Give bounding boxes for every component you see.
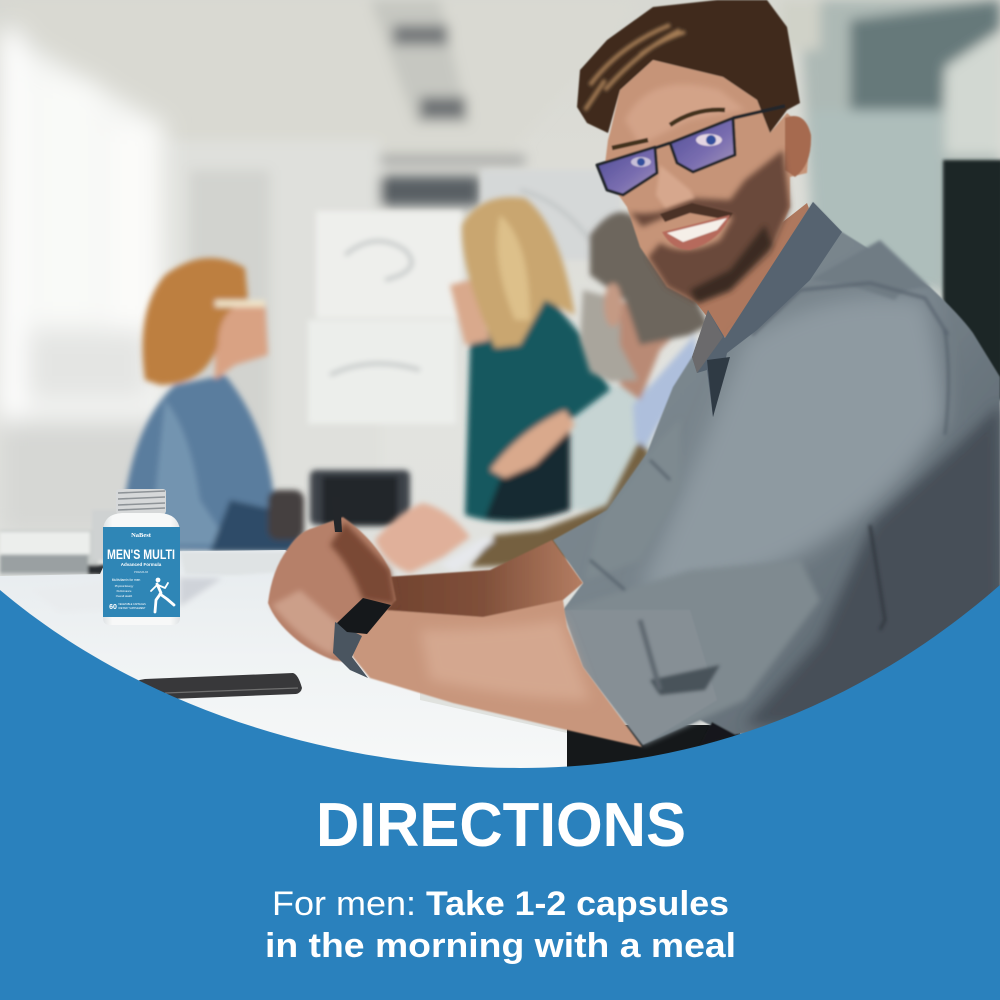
bottle label text: Physical Energy xyxy=(115,584,134,588)
heading: DIRECTIONS: DIRECTIONS xyxy=(316,791,686,860)
product bottle xyxy=(103,489,180,625)
eyebrows xyxy=(612,110,725,148)
smartphone on table xyxy=(133,673,302,699)
glasses xyxy=(597,106,785,195)
left table stack of papers xyxy=(0,510,118,576)
bottle label text: PREMIUM xyxy=(134,570,149,574)
whiteboards xyxy=(308,170,650,510)
man with gray hair xyxy=(375,212,708,573)
neck xyxy=(690,203,815,340)
ear shadow xyxy=(785,116,811,177)
blurred chair xyxy=(310,470,410,526)
bottle label text: Advanced Formula xyxy=(121,562,162,567)
bottle label text: Multivitamin for men xyxy=(112,578,140,582)
face and head xyxy=(577,0,811,303)
pen xyxy=(331,497,342,532)
instruction text: Take 1-2 capsules xyxy=(426,885,729,923)
instruction text xyxy=(265,885,736,965)
instruction text: in the morning with a meal xyxy=(265,927,736,965)
bottle label text: Overall Health xyxy=(116,594,133,598)
photo background: blurred meeting room xyxy=(0,0,1000,800)
bottle label text: 60 xyxy=(109,604,117,611)
instruction text: For men: xyxy=(272,885,416,923)
woman at whiteboard xyxy=(450,197,610,521)
forearm and hand xyxy=(268,517,642,747)
bottle label text: DIETARY SUPPLEMENT xyxy=(119,607,146,610)
mouth xyxy=(662,215,730,250)
bottle label text xyxy=(107,532,175,611)
woman on left xyxy=(120,258,304,552)
hair xyxy=(577,0,800,133)
shirt torso and sleeves xyxy=(553,202,1000,745)
nose shadow xyxy=(656,165,695,208)
blue curved footer panel xyxy=(0,585,1000,1000)
foreground man in denim shirt xyxy=(268,0,1000,747)
bottle label text: NaBest xyxy=(131,532,152,539)
bottle label text: MEN'S MULTI xyxy=(107,547,175,562)
table xyxy=(0,550,740,770)
collar xyxy=(692,202,842,417)
smartwatch xyxy=(333,598,391,678)
icon: running figure xyxy=(151,578,174,612)
beard xyxy=(630,150,790,303)
bottle label text: VEGETABLE CAPSULES xyxy=(118,603,146,606)
glass wall and dark panel xyxy=(780,0,1000,400)
forehead highlight xyxy=(625,84,745,145)
bottle label text: Performance xyxy=(117,589,132,593)
